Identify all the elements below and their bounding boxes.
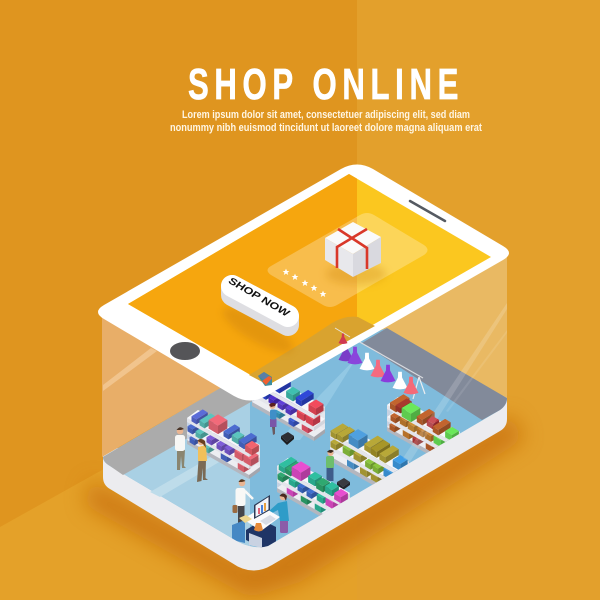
shelf: right xyxy=(387,394,460,453)
shopper: green shirt xyxy=(326,450,334,481)
title: SHOP ONLINE xyxy=(188,60,464,109)
person: man in white shirt xyxy=(175,427,186,470)
rating stars xyxy=(283,269,326,297)
shelf: back center xyxy=(252,382,325,441)
shop now button xyxy=(217,276,299,360)
gray back strip left xyxy=(103,387,256,475)
gift box xyxy=(325,222,386,285)
gray back strip right xyxy=(362,328,507,420)
body text: nonummy nibh euismod tincidunt ut laoreet dolore magna aliquam erat xyxy=(170,122,482,134)
home button xyxy=(170,342,200,360)
shopper: blue top xyxy=(269,403,276,435)
room seen through screen xyxy=(249,317,375,386)
shelf: center mid xyxy=(330,423,409,484)
shelf: front center xyxy=(277,456,350,516)
person: customer at counter xyxy=(232,479,254,523)
body text xyxy=(170,109,482,134)
glass wall: right xyxy=(380,250,507,462)
basket xyxy=(337,478,350,490)
shelf: left xyxy=(187,409,260,479)
computer monitor xyxy=(254,495,276,525)
product panel xyxy=(268,213,428,307)
store interior xyxy=(175,328,460,548)
basket xyxy=(281,432,294,445)
body text: Lorem ipsum dolor sit amet, consectetuer adipiscing elit, sed diam xyxy=(182,109,470,121)
background: left wall xyxy=(0,0,357,600)
speaker slot xyxy=(410,201,445,221)
store base xyxy=(103,395,507,571)
background: floor xyxy=(0,327,357,600)
device shadow on floor xyxy=(85,415,525,598)
background: right wall xyxy=(357,0,600,600)
person: cashier xyxy=(269,494,289,533)
person: woman in yellow shirt xyxy=(197,439,208,482)
store floor xyxy=(103,328,507,547)
checkout counter xyxy=(232,495,280,548)
glass wall: left xyxy=(102,310,246,457)
phone body xyxy=(98,164,509,400)
clothes rack xyxy=(338,342,426,400)
shop now button: SHOP NOW xyxy=(226,276,293,319)
phone screen xyxy=(128,174,491,385)
